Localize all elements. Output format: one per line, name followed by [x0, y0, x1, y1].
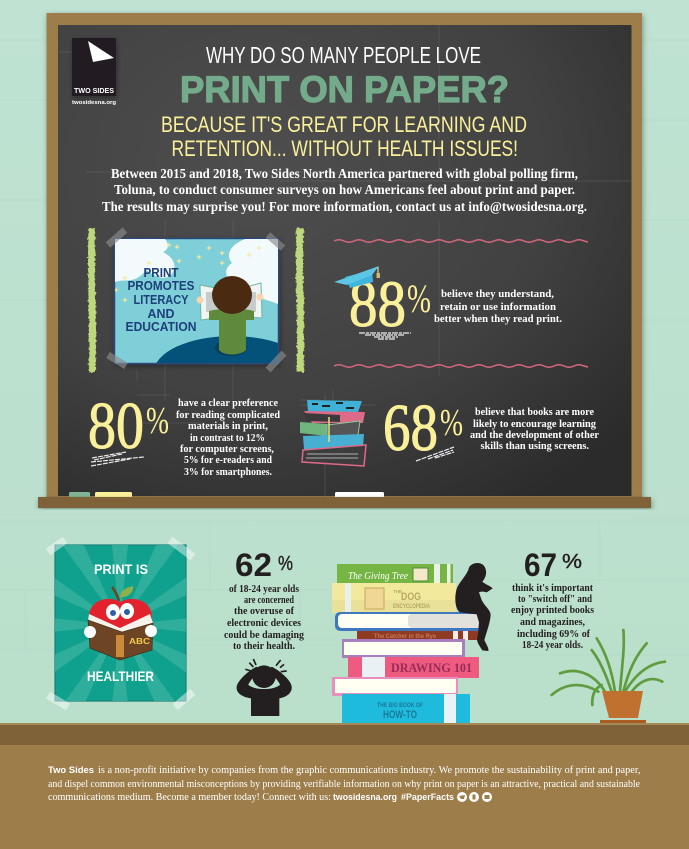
book: The Giving Tree	[337, 564, 453, 584]
poster text	[126, 265, 196, 334]
book: Drawing 101	[348, 657, 479, 678]
text: 67% description: enjoy printed books	[511, 605, 594, 616]
book: Drawing 101: DRAWING 101	[391, 660, 472, 675]
ground	[156, 336, 278, 363]
text: 68% description: believe that books are more	[475, 406, 594, 418]
stat: 68%: 68	[383, 391, 438, 465]
book: purple cover	[342, 639, 465, 658]
chalk border right	[299, 228, 301, 372]
chalk tray	[38, 497, 651, 508]
footer text: twosidesna.org	[333, 792, 397, 802]
intro paragraph: The results may surprise you! For more information, contact us at info@twosidesna.org.	[102, 199, 587, 214]
book: blue cover	[335, 612, 488, 631]
poster text: AND	[148, 306, 174, 321]
text: 88% description	[434, 288, 562, 325]
text: 67% description: think it's important	[512, 583, 593, 594]
book: The Dog Encyclopedia	[332, 583, 456, 613]
footer text: #PaperFacts	[401, 792, 454, 802]
text: 68% description: likely to encourage learning	[473, 418, 596, 430]
footer text: and dispel common environmental misconceptions by providing verifiable information on why print on paper is an attractive, practical and sustainable	[48, 779, 641, 790]
text: 80% description: in contrast to 12%	[190, 432, 265, 444]
board surface	[58, 25, 632, 496]
poster text: PRINT	[144, 265, 179, 280]
text: 80% description: for reading complicated	[176, 409, 280, 421]
title	[180, 42, 509, 110]
text: 80% description	[176, 397, 280, 478]
stars	[113, 242, 262, 303]
stat: 80%: %	[146, 400, 169, 442]
text: 88% description: believe they understand,	[441, 288, 554, 300]
chalk scribble	[91, 452, 144, 466]
chalk scribble	[359, 333, 411, 339]
text: 62% description: electronic devices	[227, 618, 301, 629]
text: 62% description: are concerned	[244, 595, 294, 606]
cloud left	[115, 239, 174, 282]
book: The Giving Tree: The Giving Tree	[348, 570, 408, 582]
panel: chalkboard	[38, 13, 651, 508]
book: pink cover	[332, 677, 458, 696]
stack of books	[332, 564, 488, 725]
stat: 67%	[524, 547, 582, 583]
text: 88% description: better when they read print.	[434, 313, 562, 325]
text: 67% description: and magazines,	[520, 617, 585, 628]
text: 68% description: skills than using screens.	[480, 440, 589, 452]
book: The Dog Encyclopedia: ENCYCLOPEDIA	[393, 603, 430, 610]
text: 62% description: of 18-24 year olds	[229, 584, 299, 595]
subtitle	[161, 112, 527, 161]
icon: apple reading book: ABC	[129, 637, 150, 646]
poster footer word: HEALTHIER	[87, 668, 154, 684]
poster text: EDUCATION	[126, 319, 196, 334]
stat: 88%	[334, 266, 431, 341]
book: The Catcher in the Rye: The Catcher in the Rye	[374, 633, 436, 640]
book: The Dog Encyclopedia: THE	[393, 589, 402, 594]
intro paragraph: Between 2015 and 2018, Two Sides North America partnered with global polling firm,	[111, 166, 578, 181]
text: 62% description: the overuse of	[234, 606, 294, 617]
sunburst rays	[55, 545, 186, 701]
text: 80% description: have a clear preference	[178, 397, 278, 409]
text: 88% description: retain or use information	[440, 301, 556, 313]
stat: 62%: 62	[235, 547, 272, 583]
chalk pieces	[69, 492, 384, 498]
book: The Dog Encyclopedia: DOG	[401, 591, 421, 603]
book: The Catcher in the Rye	[357, 631, 478, 640]
chalk scribble	[416, 447, 454, 461]
text: 80% description: for computer screens,	[180, 443, 274, 455]
squiggle bottom	[334, 365, 588, 367]
text: 68% description	[470, 406, 599, 452]
book: The Big Book of How-To: THE BIG BOOK OF	[377, 702, 423, 709]
boy reading	[196, 276, 264, 356]
logo: Two Sides: twosidesna.org	[72, 100, 116, 106]
logo: Two Sides	[72, 38, 116, 106]
icon: chalk books	[300, 400, 366, 466]
stat: 88%: %	[407, 276, 431, 321]
text: 67% description	[511, 583, 594, 651]
poster text: PROMOTES	[128, 278, 195, 293]
title: WHY DO SO MANY PEOPLE LOVE	[206, 42, 481, 68]
poster: print promotes literacy	[106, 228, 286, 372]
book: The Big Book of How-To: HOW-TO	[383, 709, 417, 721]
poster heading: PRINT IS	[94, 561, 148, 577]
stat: 67%: %	[562, 551, 582, 573]
intro paragraph: Toluna, to conduct consumer surveys on how Americans feel about print and paper.	[114, 182, 575, 197]
silhouette: reader	[455, 563, 493, 651]
icons: social media	[457, 792, 492, 802]
footer text: Two Sides	[48, 765, 94, 775]
text: 68% description: and the development of other	[470, 429, 599, 441]
book: The Big Book of How-To	[342, 694, 470, 725]
text: 80% description: 5% for e-readers and	[184, 454, 272, 466]
poster: print is healthier	[46, 537, 196, 710]
icon: apple reading book	[84, 586, 157, 660]
poster text: LITERACY	[134, 292, 189, 307]
text: 62% description: to their health.	[233, 641, 295, 652]
text: 80% description: 3% for smartphones.	[184, 466, 272, 478]
stat: 80%: 80	[88, 389, 144, 463]
stat: 67%: 67	[524, 547, 557, 583]
text: 67% description: 18-24 year olds.	[522, 640, 583, 651]
board frame	[46, 13, 642, 499]
text: 67% description: including 69% of	[517, 629, 590, 640]
chalk border left	[91, 228, 93, 372]
logo: Two Sides: TWO SIDES	[74, 86, 114, 95]
stat: 88%: 88	[349, 268, 406, 341]
panel: footer	[0, 745, 689, 849]
subtitle: BECAUSE IT'S GREAT FOR LEARNING AND	[161, 112, 527, 137]
footer text	[48, 765, 641, 803]
stat: 62%: %	[278, 553, 293, 575]
cloud right	[226, 239, 278, 304]
text: 67% description: to "switch off" and	[518, 594, 592, 605]
text: 80% description: materials in print,	[188, 420, 268, 432]
icon: graduation cap	[334, 266, 380, 288]
intro paragraph	[102, 166, 587, 214]
footer text: is a non-profit initiative by companies from the graphic communications industry. We promote the sustainability of print and paper,	[98, 765, 640, 776]
icon: potted plant	[552, 630, 665, 725]
text: 62% description: could be damaging	[224, 630, 305, 641]
stat: 62%	[235, 547, 293, 583]
shelf	[0, 723, 689, 745]
footer text: communications medium. Become a member today! Connect with us:	[48, 792, 331, 803]
subtitle: RETENTION... WITHOUT HEALTH ISSUES!	[172, 136, 518, 161]
icon: stressed person	[237, 659, 292, 716]
squiggle top	[334, 240, 588, 242]
text: 62% description	[224, 584, 305, 652]
title: PRINT ON PAPER?	[180, 69, 509, 110]
stat: 68%: %	[440, 402, 463, 444]
